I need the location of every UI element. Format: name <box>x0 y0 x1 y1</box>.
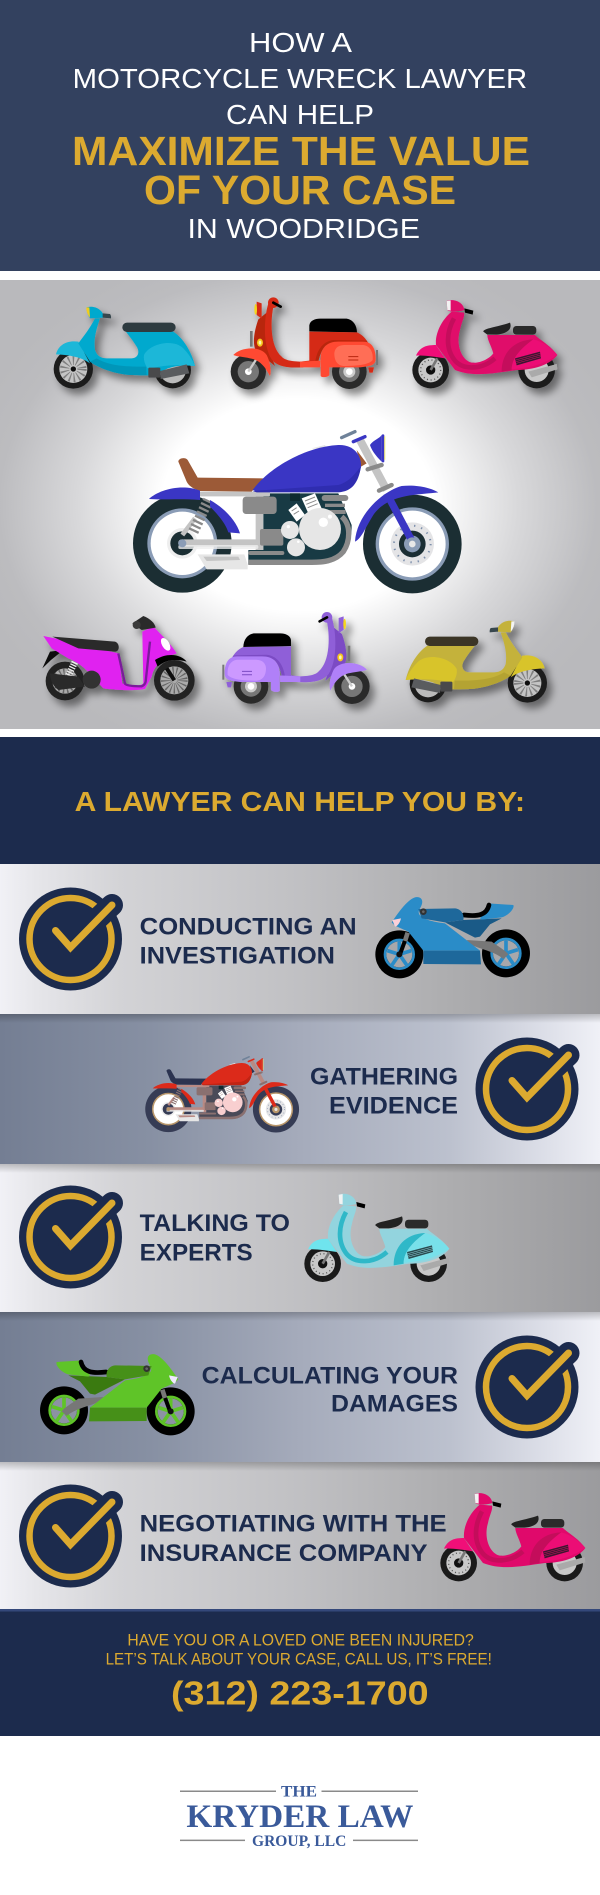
text: calculating your damages <box>202 1362 458 1418</box>
icon: check mark <box>19 888 122 990</box>
icon: red motorcycle <box>145 1057 299 1132</box>
title: how a motorcycle wreck lawyer can help: CAN HELP <box>226 99 374 130</box>
text: gathering evidence <box>310 1063 458 1119</box>
panel: a lawyer can help you by <box>0 737 600 864</box>
text: talking to experts <box>140 1210 290 1267</box>
title: how a motorcycle wreck lawyer can help: MOTORCYCLE WRECK LAWYER <box>73 63 527 94</box>
panel: negotiating with the insurance company <box>0 1462 600 1609</box>
text: negotiating with the insurance company: NEGOTIATING WITH THE <box>140 1511 447 1538</box>
icon: blue sport bike <box>375 897 530 978</box>
icon: yellow scooter <box>406 621 547 703</box>
logo: the kryder law group: KRYDER LAW <box>186 1799 413 1835</box>
icon: check mark <box>19 1484 122 1588</box>
panel: gathering evidence <box>0 1014 600 1164</box>
icon: check mark <box>476 1038 578 1140</box>
phone number: (312) 223-1700 <box>171 1674 429 1711</box>
logo: the kryder law group: GROUP, LLC <box>252 1833 346 1850</box>
panel: talking to experts <box>0 1164 600 1312</box>
icon: teal scooter <box>304 1194 449 1282</box>
icon: check mark <box>476 1336 578 1438</box>
text: call to action: HAVE YOU OR A LOVED ONE BEEN INJURED? <box>127 1631 474 1649</box>
title highlight: maximize the value of your case: OF YOUR CASE <box>144 167 456 213</box>
text: calculating your damages: CALCULATING YOUR <box>202 1362 458 1389</box>
icon: pink scooter <box>412 300 557 388</box>
text: conducting an investigation <box>140 913 357 970</box>
text: negotiating with the insurance company <box>140 1511 447 1567</box>
title highlight: maximize the value of your case: MAXIMIZE THE VALUE <box>72 128 530 174</box>
icon: green sport bike <box>40 1354 195 1435</box>
title: how a motorcycle wreck lawyer can help: HOW A <box>249 27 352 58</box>
icon: blue scooter <box>54 307 195 389</box>
icon: magenta scooter <box>42 616 195 701</box>
icon: check mark <box>19 1186 122 1288</box>
icon: blue motorcycle <box>133 432 462 593</box>
icon: purple scooter <box>222 612 370 704</box>
text: gathering evidence: EVIDENCE <box>329 1092 458 1119</box>
heading: A LAWYER CAN HELP YOU BY: <box>75 786 525 817</box>
text: call to action: LET’S TALK ABOUT YOUR CASE, CALL US, IT’S FREE! <box>106 1651 492 1669</box>
text: talking to experts: TALKING TO <box>140 1210 290 1237</box>
text: calculating your damages: DAMAGES <box>331 1391 458 1418</box>
title highlight: maximize the value of your case <box>72 128 530 213</box>
panel: motorcycles showcase <box>0 280 600 729</box>
logo: the kryder law group <box>0 1736 600 1895</box>
panel: calculating your damages <box>0 1312 600 1462</box>
icon: pink scooter <box>440 1493 585 1581</box>
logo: the kryder law group: THE <box>281 1784 317 1801</box>
text: conducting an investigation: CONDUCTING AN <box>140 913 357 940</box>
icon: red scooter <box>231 297 378 389</box>
panel: call to action <box>0 1609 600 1736</box>
subtitle: in woodridge: IN WOODRIDGE <box>188 213 420 244</box>
text: conducting an investigation: INVESTIGATION <box>140 943 335 970</box>
title: how a motorcycle wreck lawyer can help <box>73 27 527 130</box>
text: talking to experts: EXPERTS <box>140 1240 253 1267</box>
header panel <box>0 0 600 271</box>
text: gathering evidence: GATHERING <box>310 1063 458 1090</box>
text: negotiating with the insurance company: INSURANCE COMPANY <box>140 1540 427 1567</box>
panel: conducting an investigation <box>0 864 600 1014</box>
text: call to action <box>106 1631 492 1669</box>
